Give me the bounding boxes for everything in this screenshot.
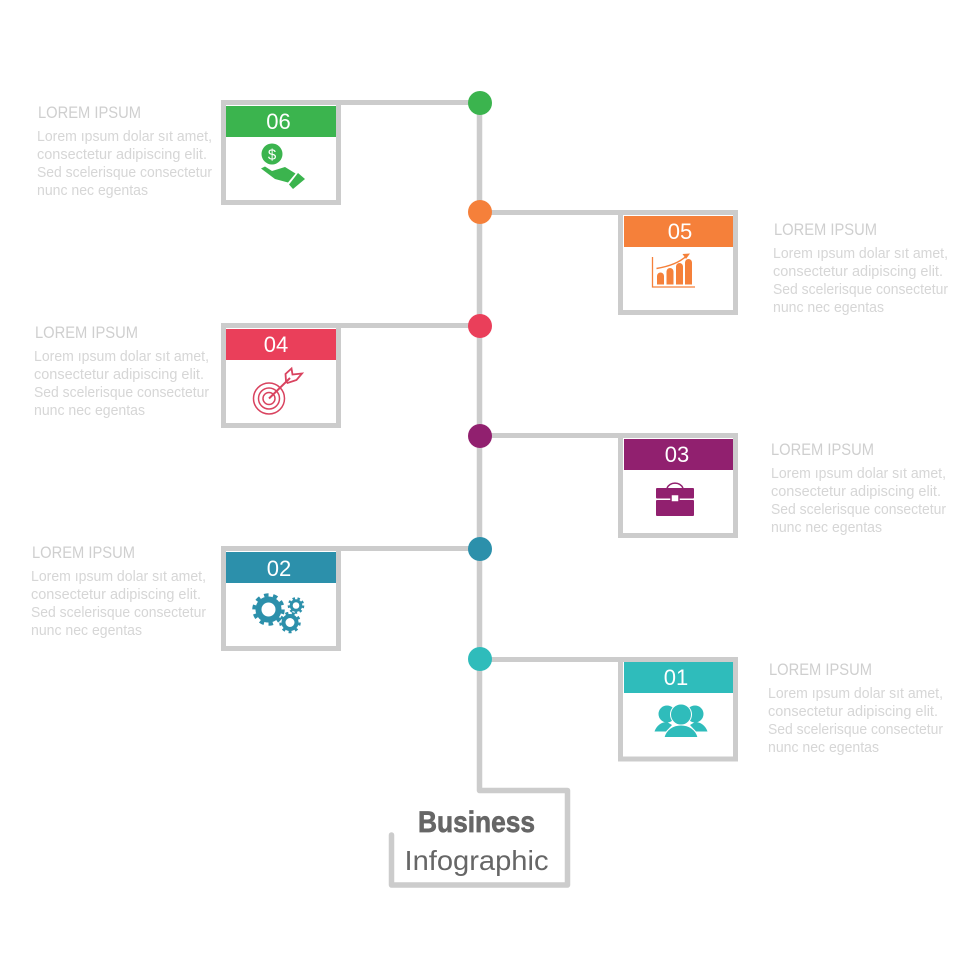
text block 03: LOREM IPSUM [771, 441, 874, 459]
step 03 panel [468, 424, 736, 536]
card frame 05 [620, 212, 736, 312]
text block 03: Sed scelerisque consectetur [771, 502, 946, 518]
header 04 [226, 329, 336, 360]
text block 03 [771, 441, 946, 536]
card frame 01 [620, 660, 736, 759]
dot 02 [468, 537, 492, 561]
text block 02: consectetur adipiscing elit. [31, 587, 201, 603]
title: Business Infographic: Business [418, 806, 535, 839]
text block 06: Sed scelerisque consectetur [37, 165, 212, 181]
header 06 [226, 106, 336, 137]
connector 03 [480, 433, 624, 438]
text block 04: nunc nec egentas [34, 403, 145, 419]
step 01 panel [468, 647, 736, 759]
icon: group of people [654, 704, 708, 738]
step 06 panel [224, 91, 492, 202]
text block 06: nunc nec egentas [37, 183, 148, 199]
connector 05 [480, 210, 624, 215]
title: Business Infographic: Infographic [404, 845, 548, 876]
text block 04: Sed scelerisque consectetur [34, 385, 209, 401]
text block 03: Lorem ıpsum dolar sıt amet, [771, 466, 946, 482]
title: Business Infographic [404, 806, 548, 876]
icon: gears [254, 595, 303, 632]
text block 01: Lorem ıpsum dolar sıt amet, [768, 686, 943, 702]
icon: hand holding coin [261, 144, 305, 189]
text block 02: Sed scelerisque consectetur [31, 605, 206, 621]
card frame 02 [224, 548, 338, 648]
text block 05: Lorem ıpsum dolar sıt amet, [773, 246, 948, 262]
number 01: 01 [664, 665, 688, 690]
text block 01 [768, 661, 943, 756]
text block 04: LOREM IPSUM [35, 324, 138, 342]
text block 05 [773, 221, 948, 316]
text block 06: consectetur adipiscing elit. [37, 147, 207, 163]
number 05: 05 [668, 219, 692, 244]
dot 04 [468, 314, 492, 338]
header 02 [226, 552, 336, 583]
header 05 [624, 216, 733, 247]
card frame 03 [620, 436, 736, 536]
text block 03: consectetur adipiscing elit. [771, 484, 941, 500]
text block 01: Sed scelerisque consectetur [768, 722, 943, 738]
text block 05: Sed scelerisque consectetur [773, 282, 948, 298]
step 02 panel [224, 537, 492, 648]
connector 04 [336, 323, 480, 328]
text block 01: nunc nec egentas [768, 740, 879, 756]
central timeline spine and base bracket [392, 103, 568, 885]
icon: briefcase [656, 483, 694, 516]
text block 05: consectetur adipiscing elit. [773, 264, 943, 280]
text block 06: LOREM IPSUM [38, 104, 141, 122]
connector 01 [480, 657, 624, 662]
dot 06 [468, 91, 492, 115]
text block 01: consectetur adipiscing elit. [768, 704, 938, 720]
connector 06 [336, 100, 480, 105]
icon: growth chart [652, 254, 695, 287]
header 01 [624, 662, 733, 693]
step 04 panel [224, 314, 492, 426]
text block 05: nunc nec egentas [773, 300, 884, 316]
number 03: 03 [665, 442, 689, 467]
text block 02: LOREM IPSUM [32, 544, 135, 562]
text block 06: Lorem ıpsum dolar sıt amet, [37, 129, 212, 145]
text block 02 [31, 544, 206, 639]
icon: hand holding coin: $ [268, 146, 277, 164]
text block 04: consectetur adipiscing elit. [34, 367, 204, 383]
text block 04: Lorem ıpsum dolar sıt amet, [34, 349, 209, 365]
step 05 panel [468, 200, 736, 312]
connector 02 [336, 546, 480, 551]
header 03 [624, 439, 733, 470]
dot 01 [468, 647, 492, 671]
text block 06 [37, 104, 212, 199]
card frame 06 [224, 102, 338, 202]
text block 02: Lorem ıpsum dolar sıt amet, [31, 569, 206, 585]
icon: target with arrow [254, 368, 302, 414]
card frame 04 [224, 326, 338, 426]
text block 05: LOREM IPSUM [774, 221, 877, 239]
number 04: 04 [264, 332, 288, 357]
text block 03: nunc nec egentas [771, 520, 882, 536]
text block 04 [34, 324, 209, 419]
text block 02: nunc nec egentas [31, 623, 142, 639]
text block 01: LOREM IPSUM [769, 661, 872, 679]
dot 05 [468, 200, 492, 224]
number 02: 02 [267, 556, 291, 581]
number 06: 06 [266, 109, 291, 134]
dot 03 [468, 424, 492, 448]
